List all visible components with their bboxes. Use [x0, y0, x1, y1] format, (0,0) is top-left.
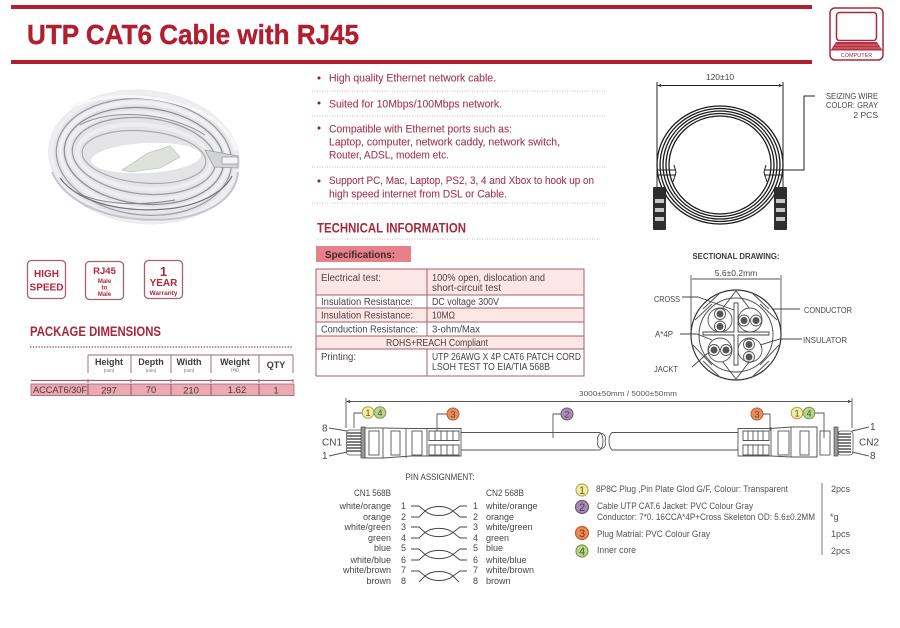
specifications table: Electrical test: [321, 273, 381, 284]
pin assignment diagram: 3 [473, 522, 478, 532]
heading: package dimensions: PACKAGE DIMENSIONS [30, 324, 161, 339]
pin assignment diagram: orange [363, 512, 391, 522]
parts legend: *g [830, 512, 839, 522]
parts legend: 2 [579, 502, 585, 514]
specifications table: 10MΩ [432, 310, 455, 322]
specifications table: Insulation Resistance: [321, 310, 413, 322]
pin assignment diagram: orange [486, 512, 514, 522]
parts legend: Cable UTP CAT.6 Jacket: PVC Colour Gray [597, 501, 753, 511]
seizing wire note: SEIZING WIRE [826, 91, 878, 101]
table: package dimensions: (mm) [104, 368, 115, 373]
feature bullet list: Laptop, computer, network caddy, network switch, [329, 136, 560, 148]
sectional drawing of cable: CROSS [654, 294, 680, 304]
table: package dimensions: ACCAT6/30F [33, 385, 88, 395]
specifications table: 3-ohm/Max [432, 324, 480, 336]
parts legend: 1pcs [831, 529, 851, 539]
pin assignment diagram: 1 [473, 501, 478, 511]
pin assignment diagram: brown [366, 576, 391, 586]
sectional drawing of cable: INSULATOR [803, 335, 847, 345]
feature bullet list: Compatible with Ethernet ports such as: [329, 124, 512, 136]
pin assignment diagram: white/blue [485, 555, 527, 565]
table: package dimensions: Weight [220, 357, 250, 367]
sectional drawing of cable: SECTIONAL DRAWING: [692, 252, 780, 261]
specifications table: Conduction Resistance: [321, 324, 418, 336]
parts legend: 4 [579, 546, 585, 558]
badge: RJ45 male to male: Male [98, 279, 112, 285]
pin assignment diagram: brown [486, 576, 511, 586]
badge: RJ45 male to male [86, 262, 124, 300]
callout markers on connectors: 2 [564, 410, 570, 420]
badge: RJ45 male to male: RJ45 [93, 266, 117, 277]
callout markers on connectors: 1 [794, 408, 800, 418]
pin assignment diagram: white/green [343, 522, 391, 532]
icon: computer category badge: COMPUTER [841, 53, 872, 59]
callout markers on connectors: 4 [377, 408, 383, 418]
badge: high speed: HIGH [34, 269, 59, 280]
pin assignment diagram: 4 [473, 533, 478, 543]
specifications table: short-circuit test [432, 283, 501, 294]
specifications table [316, 269, 584, 376]
badge: high speed [28, 260, 66, 298]
pin assignment diagram: 2 [473, 512, 478, 522]
pin assignment diagram: 2 [401, 512, 406, 522]
table: package dimensions: 1.62 [228, 385, 246, 396]
specifications table: 100% open, dislocation and [432, 273, 545, 284]
table: package dimensions: (mm) [184, 368, 195, 373]
badge: 1 year warranty [144, 260, 182, 298]
header band with title [11, 5, 812, 64]
pin assignment diagram: white/blue [349, 555, 391, 565]
cable coil dimension drawing [653, 72, 878, 230]
pin assignment diagram: white/green [485, 522, 533, 532]
pin assignment diagram: 5 [401, 543, 406, 553]
specifications label [316, 239, 600, 262]
pin assignment diagram: 8 [473, 576, 478, 586]
pin assignment diagram: white/brown [485, 565, 534, 575]
cable coil dimension drawing: 120±10 [706, 72, 734, 82]
pin assignment diagram: 3 [401, 522, 406, 532]
sectional drawing of cable: JACKT [654, 364, 678, 374]
pin assignment diagram [338, 472, 538, 586]
connector CN1 with cable: 1 [322, 451, 328, 462]
seizing wire note: 2 PCS [853, 110, 878, 120]
badge: 1 year warranty: YEAR [150, 278, 178, 289]
sectional drawing of cable: A*4P [655, 329, 673, 339]
pin assignment diagram: 6 [401, 555, 406, 565]
product photo: coiled white cable [42, 80, 246, 234]
parts legend: 2pcs [831, 484, 851, 494]
pin assignment diagram: green [368, 533, 391, 543]
feature bullet list [312, 72, 605, 203]
cable overall length dimension [346, 391, 852, 428]
pin assignment diagram: CN1 568B [354, 488, 391, 498]
table: package dimensions: Depth [138, 357, 164, 367]
connector CN2 with cable: CN2 [859, 438, 879, 448]
table: package dimensions: Height [95, 357, 123, 367]
table: package dimensions: (kg) [231, 367, 239, 372]
specifications table: ROHS+REACH Compliant [386, 338, 488, 349]
pin assignment diagram: green [486, 533, 509, 543]
cable overall length dimension: 3000±50mm / 5000±50mm [579, 391, 677, 398]
parts legend: 8P8C Plug ,Pin Plate Glod G/F, Colour: Transparent [596, 484, 788, 494]
badge: 1 year warranty: Warranty [150, 290, 178, 297]
title: UTP CAT6 Cable with RJ45 [27, 19, 359, 50]
callout markers on connectors: 4 [806, 408, 812, 418]
sectional drawing of cable: 5.6±0.2mm [715, 268, 757, 278]
specifications table: LSOH TEST TO EIA/TIA 568B [432, 362, 550, 373]
seizing wire note [826, 91, 878, 120]
parts legend: 2pcs [831, 546, 851, 556]
specifications table: Insulation Resistance: [321, 297, 413, 308]
connector CN2 with cable: 8 [870, 451, 876, 462]
parts legend: 3 [579, 528, 585, 540]
pin assignment diagram: white/brown [342, 565, 391, 575]
feature bullet list: Suited for 10Mbps/100Mbps network. [329, 98, 502, 110]
pin assignment diagram: 5 [473, 543, 478, 553]
pin assignment diagram: 4 [401, 533, 406, 543]
table: package dimensions [30, 347, 294, 396]
pin assignment diagram: white/orange [485, 501, 538, 511]
feature bullet list: Router, ADSL, modem etc. [329, 150, 449, 162]
connector CN2 with cable: 1 [870, 422, 876, 433]
parts legend [576, 483, 851, 558]
callout markers on connectors: 3 [754, 410, 760, 420]
pin assignment diagram: 1 [401, 501, 406, 511]
table: package dimensions: QTY [267, 360, 285, 370]
specifications label: Specifications: [325, 249, 395, 261]
parts legend: Plug Matrial: PVC Colour Gray [597, 529, 710, 539]
feature bullet list: High quality Ethernet network cable. [329, 72, 496, 84]
connector CN1 with cable: 8 [322, 424, 328, 434]
heading: technical information: TECHNICAL INFORMATION [317, 220, 466, 236]
parts legend: 1 [579, 485, 585, 497]
pin assignment diagram: 8 [401, 576, 406, 586]
table: package dimensions: 70 [146, 385, 156, 396]
badge: RJ45 male to male: to [102, 286, 108, 292]
pin assignment diagram: 7 [401, 565, 406, 575]
pin assignment diagram: CN2 568B [486, 488, 524, 498]
parts legend: Conductor: 7*0. 16CCA*4P+Cross Skeleton OD: 5.6±0.2MM [597, 512, 815, 522]
pin assignment diagram: 7 [473, 565, 478, 575]
connector CN2 with cable [609, 413, 879, 462]
callout markers on connectors: 1 [365, 408, 371, 418]
callout markers on connectors: 3 [450, 410, 456, 420]
table: package dimensions: 297 [101, 386, 117, 396]
feature bullet list: high speed internet from DSL or Cable. [329, 188, 507, 200]
specifications table: UTP 26AWG X 4P CAT6 PATCH CORD [432, 352, 581, 363]
parts legend: Inner core [597, 545, 636, 555]
table: package dimensions: (mm) [146, 368, 157, 373]
connector CN1 with cable: CN1 [322, 438, 342, 448]
table: package dimensions: 1 [273, 386, 279, 396]
sectional drawing of cable [654, 252, 852, 380]
feature bullet list: Support PC, Mac, Laptop, PS2, 3, 4 and Xbox to hook up on [329, 175, 594, 187]
pin assignment diagram: 6 [473, 555, 478, 565]
badge: high speed: SPEED [30, 282, 63, 294]
table: package dimensions: Width [177, 357, 201, 367]
seizing wire note: COLOR: GRAY [826, 100, 878, 110]
connector CN1 with cable [322, 413, 606, 462]
badge: 1 year warranty: 1 [160, 264, 167, 279]
pin assignment diagram: blue [486, 543, 503, 553]
pin assignment diagram: PIN ASSIGNMENT: [406, 472, 474, 482]
pin assignment diagram: white/orange [338, 501, 391, 511]
callout markers on connectors [362, 407, 815, 420]
sectional drawing of cable: CONDUCTOR [804, 305, 852, 315]
specifications table: Printing: [321, 352, 356, 363]
icon: computer category badge [830, 8, 883, 60]
pin assignment diagram: blue [374, 543, 391, 553]
table: package dimensions: 210 [183, 386, 199, 396]
badge: RJ45 male to male: Male [98, 292, 112, 298]
specifications table: DC voltage 300V [432, 297, 499, 308]
